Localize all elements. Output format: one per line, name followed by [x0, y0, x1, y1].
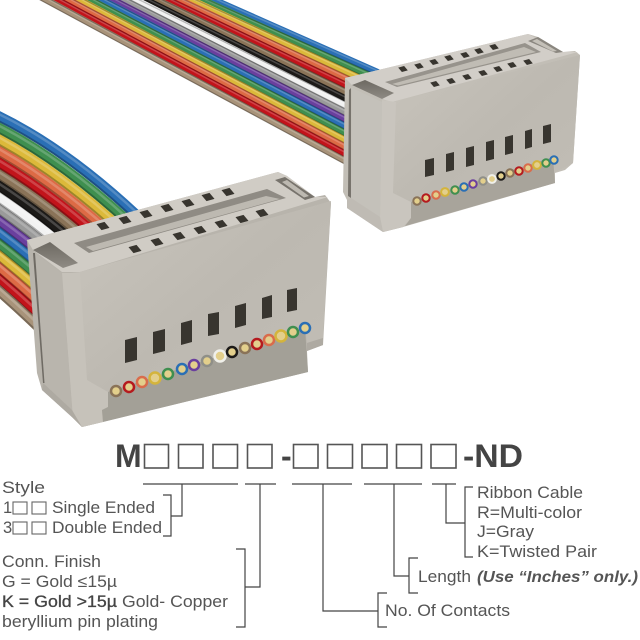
legend: connector finish: beryllium pin plating: [2, 613, 158, 631]
part number heading: -ND: [463, 438, 523, 474]
legend: length: (Use “Inches” only.): [477, 569, 638, 586]
legend: ribbon cable: [477, 484, 598, 561]
legend: connector finish: Conn. Finish: [2, 553, 101, 571]
back ribbon cable: [27, 0, 381, 182]
legend: connector finish: K = Gold >15µ: [2, 593, 118, 611]
connector lines: [143, 484, 473, 627]
legend: ribbon cable: K=Twisted Pair: [477, 543, 598, 561]
legend: style: 1: [3, 499, 12, 517]
legend: style: Double Ended: [52, 519, 162, 537]
back connector: [343, 34, 580, 232]
legend: connector finish: Gold- Copper: [122, 593, 229, 611]
part number heading: [115, 438, 523, 474]
front ribbon cable: [0, 111, 138, 330]
legend: number of contacts: No. Of Contacts: [385, 602, 510, 620]
part number heading: -: [281, 438, 292, 474]
part number heading: M: [115, 438, 142, 474]
legend: style: Style: [2, 479, 45, 497]
legend: connector finish: [2, 553, 229, 631]
legend: ribbon cable: R=Multi-color: [477, 504, 583, 522]
legend: style: [2, 479, 162, 537]
legend: connector finish: G = Gold ≤15µ: [2, 573, 118, 591]
legend: style: 3: [3, 519, 12, 537]
legend: length: [418, 568, 638, 586]
front connector: [27, 172, 331, 427]
legend: ribbon cable: Ribbon Cable: [477, 484, 583, 502]
legend: style: Single Ended: [52, 499, 155, 517]
legend: length: Length: [418, 568, 471, 586]
legend: ribbon cable: J=Gray: [477, 523, 535, 541]
